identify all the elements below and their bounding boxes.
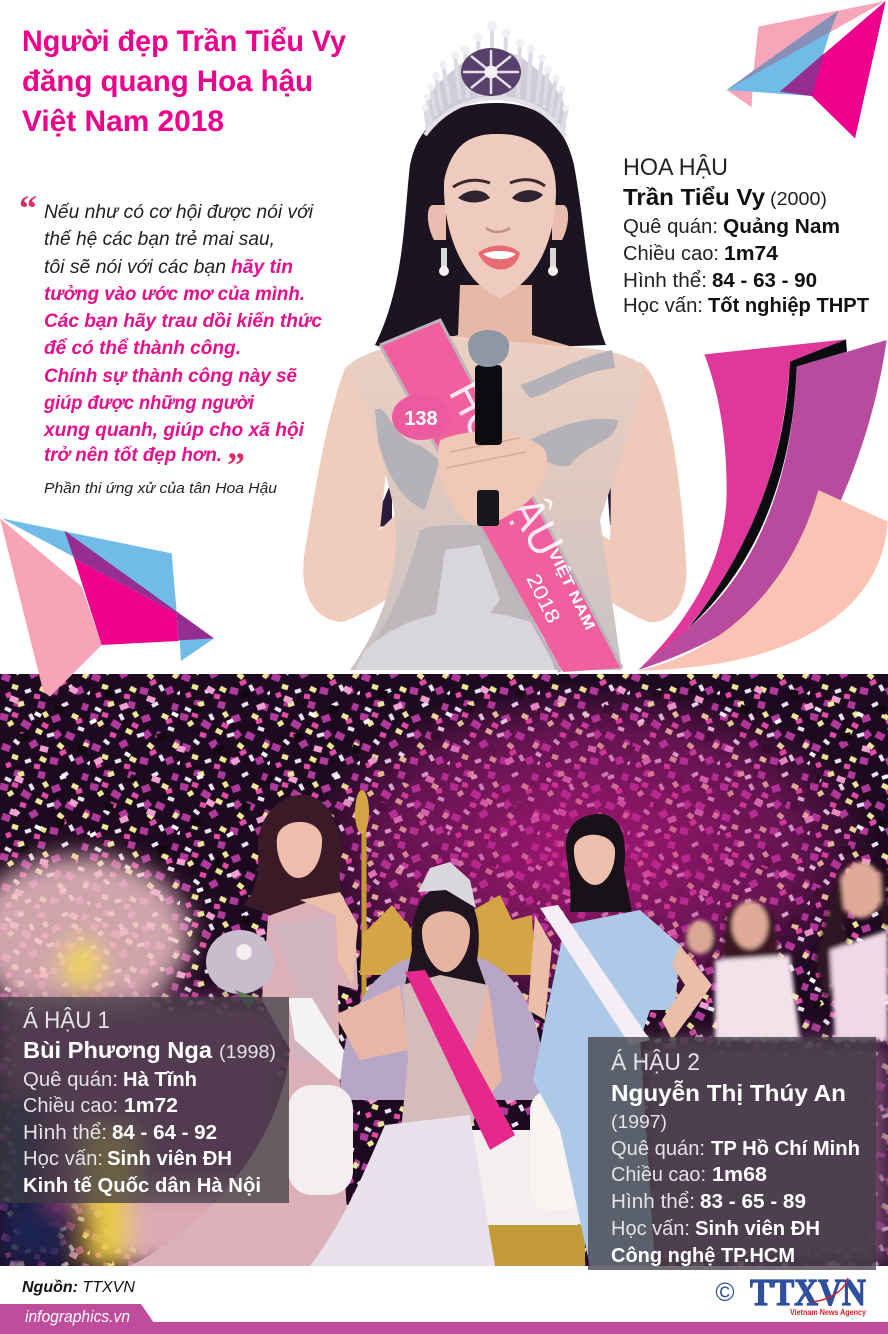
title: đăng quang Hoa hậu: [22, 65, 313, 98]
earrings: [444, 248, 553, 272]
profile: Hoa hậu: Quê quán:: [623, 216, 718, 238]
panel: Á hậu 1: [0, 997, 289, 1203]
panel: Á hậu 1: 84 - 64 - 92: [112, 1122, 217, 1144]
panel: Á hậu 2: Quê quán:: [611, 1138, 705, 1160]
arm right: [510, 362, 687, 622]
logo: TTXVN: TTXVN: [750, 1272, 866, 1314]
title: Việt Nam 2018: [22, 105, 224, 138]
panel: Á hậu 1: 1m72: [124, 1095, 178, 1117]
panel: Á hậu 2: [588, 1037, 876, 1270]
panel: Á hậu 1: Học vấn:: [23, 1148, 103, 1170]
panel: Á hậu 1: Bùi Phương Nga: [23, 1037, 212, 1063]
profile: Hoa hậu: Quảng Nam: [723, 216, 840, 238]
figure: second runner-up: [528, 814, 712, 1266]
hair: [375, 103, 606, 352]
panel: Á hậu 1: Sinh viên ĐH: [107, 1148, 232, 1170]
portrait: Hoa hậu Trần Tiểu Vy: [303, 21, 687, 672]
hands: [438, 431, 547, 525]
badge: contestant number: 138: [404, 408, 438, 430]
bouquet: [206, 930, 274, 994]
panel: Á hậu 2: Học vấn:: [611, 1218, 690, 1240]
panel: Á hậu 1: (1998): [219, 1042, 276, 1062]
profile: Hoa hậu: [623, 154, 869, 317]
footer band: infographics.vn: [25, 1307, 130, 1326]
sash text: VIỆT NAM: [544, 546, 599, 633]
icon: closing quote mark: ”: [227, 445, 245, 485]
hairline: [430, 120, 568, 195]
panel: Á hậu 2: Á HẬU 2: [611, 1049, 700, 1076]
panel: Á hậu 2: 1m68: [712, 1164, 767, 1186]
quote block: thế hệ các bạn trẻ mai sau,: [44, 229, 275, 250]
title: Người đẹp Trần Tiểu Vy: [22, 25, 346, 58]
panel: Á hậu 1: Hà Tĩnh: [123, 1069, 197, 1091]
profile: Hoa hậu: Chiều cao:: [623, 243, 719, 265]
portrait: Hoa hậu Trần Tiểu Vy: HOA HẬU: [439, 372, 574, 564]
panel: Á hậu 1: Á HẬU 1: [23, 1007, 110, 1034]
lace: [375, 350, 618, 510]
crown: [422, 21, 570, 138]
profile: Hoa hậu: Trần Tiểu Vy: [623, 184, 765, 210]
logo: TTXVN: [715, 1272, 866, 1317]
dress: [345, 335, 643, 670]
arm left: [303, 368, 480, 622]
brows: [453, 180, 545, 187]
decoration: paper plane bottom left: [0, 518, 214, 697]
panel: Á hậu 2: Công nghệ TP.HCM: [611, 1245, 795, 1267]
figures: contestants at right: [686, 862, 888, 1040]
blurred crowd: left and right: [0, 855, 888, 1266]
profile: Hoa hậu: Hình thể:: [623, 270, 707, 292]
logo: TTXVN: Vietnam News Agency: [790, 1308, 866, 1317]
profile: Hoa hậu: Tốt nghiệp THPT: [708, 295, 869, 317]
panel: Á hậu 2: (1997): [611, 1112, 667, 1132]
decoration: curved ribbons right: [638, 339, 888, 671]
panel: Á hậu 1: Kinh tế Quốc dân Hà Nội: [23, 1175, 261, 1197]
lips: [478, 246, 520, 270]
ears: [428, 205, 568, 240]
title: [22, 25, 346, 138]
panel: Á hậu 2: Sinh viên ĐH: [695, 1218, 820, 1240]
panel: Á hậu 1: Quê quán:: [23, 1069, 118, 1091]
quote block: Nếu như có cơ hội được nói với: [44, 202, 314, 223]
profile: Hoa hậu: 1m74: [724, 243, 779, 265]
panel: Á hậu 2: 83 - 65 - 89: [700, 1191, 806, 1213]
face: [444, 134, 556, 298]
quote block: trở nên tốt đẹp hơn.: [44, 445, 222, 466]
neck: [400, 285, 590, 352]
quote block: [19, 188, 322, 497]
attribution: Phần thi ứng xử của tân Hoa Hậu: [44, 480, 278, 497]
profile: Hoa hậu: HOA HẬU: [623, 154, 728, 181]
logo: TTXVN: ©: [715, 1277, 735, 1307]
figure: winner seated: [310, 862, 515, 1266]
portrait: Hoa hậu Trần Tiểu Vy: 2018: [522, 571, 564, 627]
panel: Á hậu 1: Chiều cao:: [23, 1095, 118, 1117]
badge: contestant number: [392, 394, 450, 440]
quote block: xung quanh, giúp cho xã hội: [43, 420, 305, 441]
scepter: [355, 790, 369, 1010]
sash: [380, 320, 622, 672]
photo: coronation with confetti: [0, 674, 888, 1266]
panel: Á hậu 2: Nguyễn Thị Thúy An: [611, 1079, 846, 1106]
profile: Hoa hậu: 84 - 63 - 90: [712, 270, 817, 292]
decoration: paper plane top right: [727, 1, 886, 138]
quote block: hãy tin: [231, 257, 293, 278]
quote block: để có thể thành công.: [44, 338, 241, 359]
panel: Á hậu 2: TP Hồ Chí Minh: [711, 1138, 860, 1160]
microphone: [468, 330, 509, 526]
quote block: tôi sẽ nói với các bạn: [44, 257, 226, 278]
profile: Hoa hậu: Học vấn:: [623, 295, 703, 317]
quote block: Các bạn hãy trau dồi kiến thức: [44, 311, 322, 332]
profile: Hoa hậu: (2000): [770, 189, 827, 209]
panel: Á hậu 2: Chiều cao:: [611, 1164, 706, 1186]
glow: magenta stage light: [300, 680, 880, 1020]
icon: opening quote mark: “: [19, 188, 37, 228]
quote block: Chính sự thành công này sẽ: [44, 366, 297, 387]
footer band: [0, 1304, 888, 1334]
panel: Á hậu 1: Hình thể:: [23, 1122, 107, 1144]
nose: [486, 228, 510, 232]
figure: first runner-up: [130, 795, 358, 1266]
eyes: [458, 190, 543, 202]
throne: [288, 895, 585, 1266]
source: Nguồn: TTXVN: [22, 1279, 135, 1296]
sash: first runner-up: [288, 998, 350, 1080]
quote block: tưởng vào ước mơ của mình.: [44, 284, 305, 305]
panel: Á hậu 2: Hình thể:: [611, 1191, 695, 1213]
quote block: giúp được những người: [43, 393, 255, 414]
